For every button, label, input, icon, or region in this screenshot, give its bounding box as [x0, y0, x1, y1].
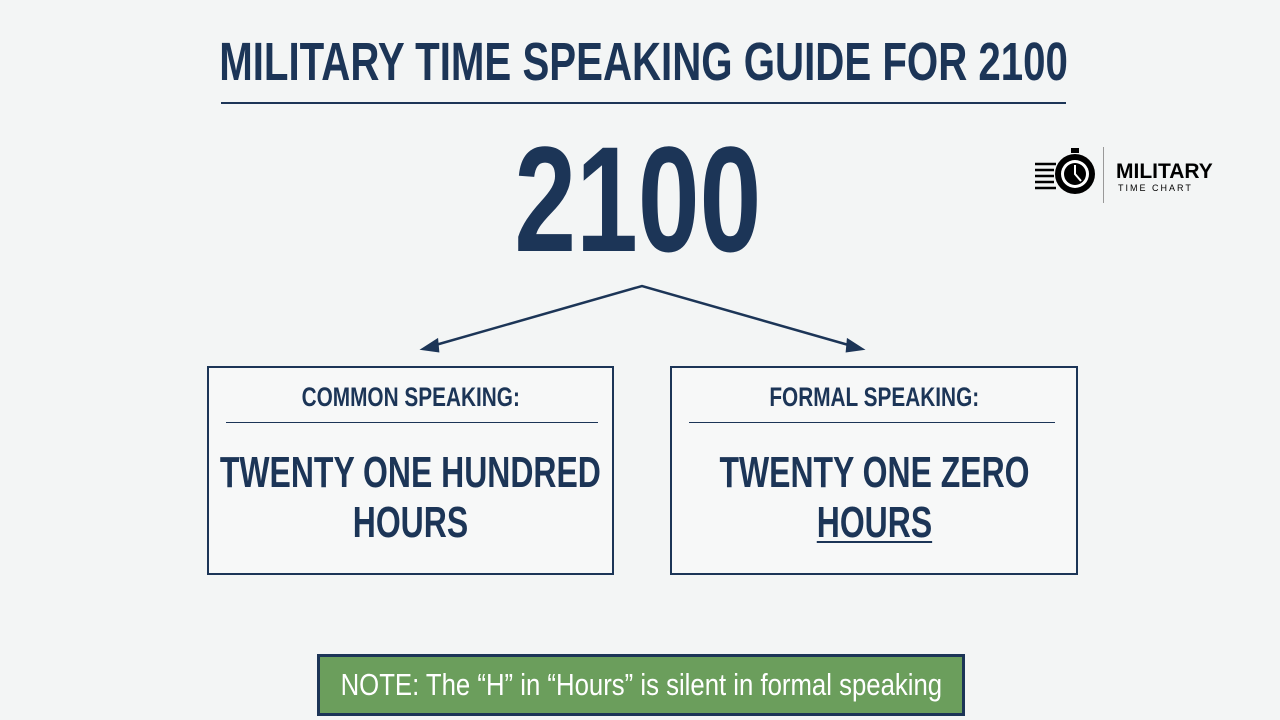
logo: TIME CHART: [1118, 183, 1193, 193]
panel: formal: [670, 366, 1078, 575]
panel: common: COMMON SPEAKING:: [301, 382, 520, 412]
panel: common: [207, 366, 614, 575]
panel: common: TWENTY ONE HUNDRED: [220, 448, 601, 497]
note: NOTE: The “H” in “Hours” is silent in formal speaking: [340, 667, 942, 702]
logo: MILITARY: [1116, 160, 1213, 183]
panel: common: HOURS: [353, 498, 468, 547]
note: [317, 654, 965, 716]
panel: formal: FORMAL SPEAKING:: [769, 382, 979, 412]
big number: 2100: [515, 115, 761, 283]
panel: formal: TWENTY ONE ZERO: [719, 448, 1029, 497]
panel: formal: HOURS: [816, 498, 932, 547]
title: MILITARY TIME SPEAKING GUIDE FOR 2100: [220, 32, 1068, 92]
logo: [1035, 147, 1213, 203]
